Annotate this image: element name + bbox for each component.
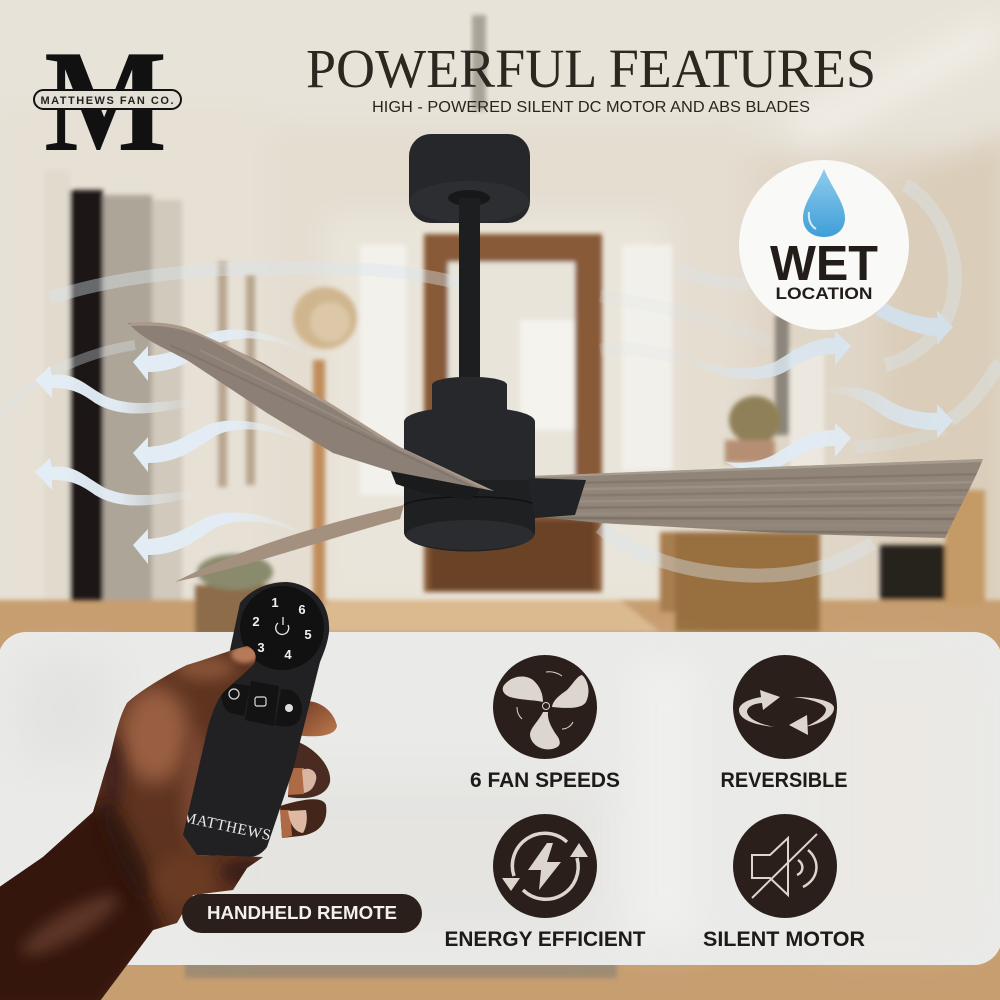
- remote speed buttons: 5: [304, 627, 312, 642]
- handheld remote label: [182, 894, 422, 933]
- label: ENERGY EFFICIENT: [444, 928, 646, 951]
- logo: Matthews Fan Co.: M: [44, 20, 167, 182]
- remote speed buttons: 1: [271, 595, 279, 610]
- handheld remote label: HANDHELD REMOTE: [207, 903, 397, 923]
- ring fingernail: [288, 810, 307, 833]
- remote speed buttons: 2: [252, 614, 260, 629]
- hand holding remote: [0, 582, 350, 1000]
- subtitle: HIGH - POWERED SILENT DC MOTOR AND ABS BLADES: [372, 99, 810, 116]
- feature: 6 fan speeds: [470, 655, 620, 792]
- arrows: airflow right: [675, 303, 953, 472]
- logo: Matthews Fan Co.: MATTHEWS FAN CO.: [40, 95, 174, 107]
- icon: lightning cycle: [493, 814, 597, 918]
- remote speed buttons: [252, 595, 312, 662]
- feature: silent motor: [703, 814, 865, 951]
- ring finger side: [280, 810, 292, 838]
- icon: water drop: [803, 169, 845, 237]
- remote speed buttons: 3: [257, 640, 265, 655]
- wet label: WET: [770, 237, 878, 291]
- middle fingernail: [302, 769, 316, 793]
- floor rug edge: [185, 960, 617, 978]
- ceiling canopy: [409, 134, 530, 223]
- remote function buttons: [222, 681, 302, 727]
- label: 6 FAN SPEEDS: [470, 769, 620, 792]
- ceiling fan: [128, 134, 985, 582]
- downrod: [459, 198, 480, 380]
- icon: muted speaker: [733, 814, 837, 918]
- feature: reversible: [720, 655, 848, 792]
- index finger: [295, 701, 337, 736]
- remote brand: MATTHEWS: [181, 809, 273, 844]
- arrows: airflow left: [35, 329, 310, 564]
- hand and forearm: [0, 646, 263, 1000]
- feature: energy efficient: [444, 814, 646, 951]
- title: POWERFUL FEATURES: [306, 38, 876, 99]
- icon: rotation arrows: [733, 655, 837, 759]
- remote speed buttons: 4: [284, 647, 292, 662]
- motor housing: [388, 377, 586, 552]
- middle finger: [288, 740, 330, 798]
- ring finger: [280, 799, 326, 838]
- label: SILENT MOTOR: [703, 928, 865, 951]
- bottom translucent panel: [0, 632, 1000, 965]
- location label: LOCATION: [776, 284, 872, 303]
- middle finger side: [288, 768, 304, 795]
- blade: right: [528, 459, 985, 538]
- wet location badge: [739, 160, 909, 330]
- icon: fan: [493, 655, 597, 759]
- blade: upper left: [128, 322, 494, 491]
- label: REVERSIBLE: [720, 769, 848, 792]
- blade: lower left: [175, 505, 404, 582]
- remote body: [181, 582, 329, 857]
- faint airflow trails: [0, 185, 1000, 576]
- remote power icon: [276, 617, 289, 634]
- remote speed buttons: 6: [298, 602, 306, 617]
